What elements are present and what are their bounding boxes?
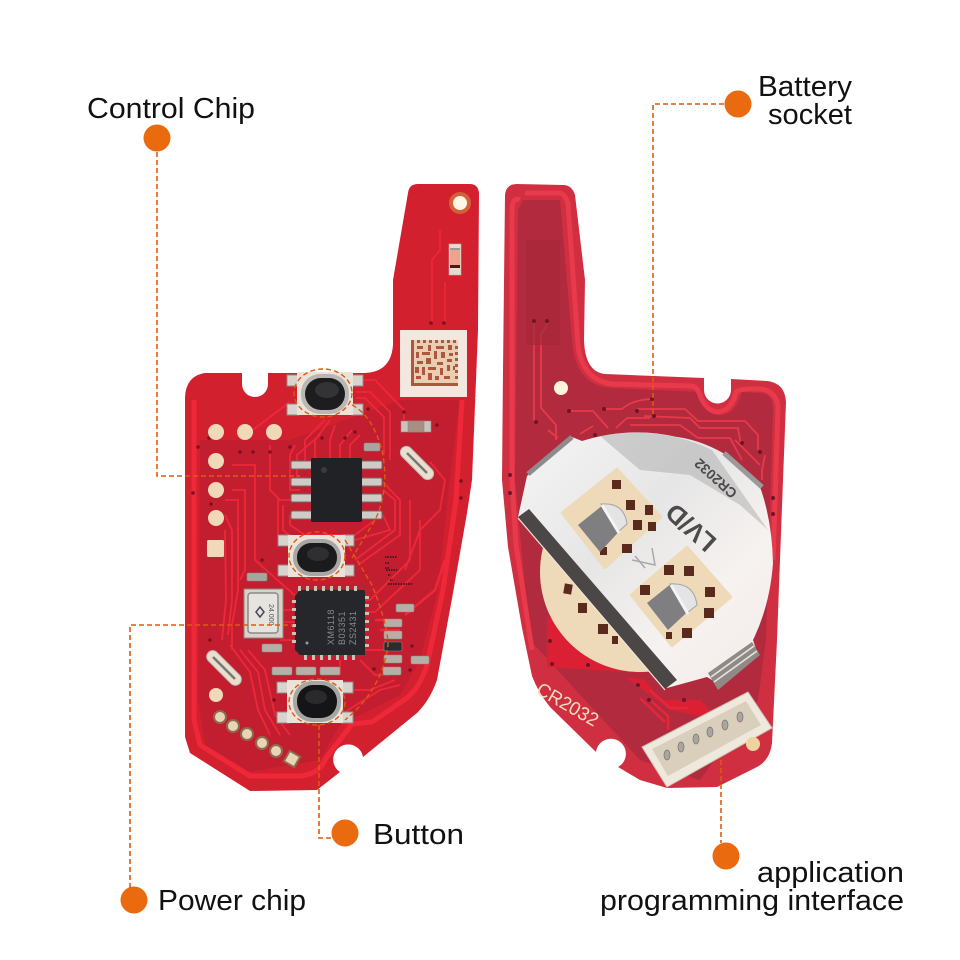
spring contacts <box>204 444 436 688</box>
programming connector <box>642 692 772 787</box>
callout: button <box>289 369 464 851</box>
control chip SOP8 <box>291 458 382 522</box>
callout: battery socket: socket <box>768 99 852 131</box>
panel: left circuit board, button side <box>185 184 479 791</box>
small capacitors and resistors <box>247 421 431 675</box>
callout: control chip: Control Chip <box>87 93 255 125</box>
crystal oscillator: 24.000 <box>267 604 274 626</box>
panel: right circuit board, battery side <box>502 184 786 788</box>
power chip QFN: XM6118 <box>326 609 336 645</box>
tan battery contact disc <box>540 472 740 672</box>
clip metal body <box>518 432 773 688</box>
clip stamped mark <box>632 548 655 568</box>
callout: application programming interface: programming interface <box>600 885 904 917</box>
button: top tact switch <box>287 372 363 415</box>
clip beveled dark edge <box>518 509 677 689</box>
tan contact pads <box>207 424 282 702</box>
stamped lettering <box>659 455 740 558</box>
stamped lettering: CR2032 <box>691 455 740 502</box>
callout: button: Button <box>373 819 464 851</box>
button: bottom tact switch <box>277 680 353 723</box>
infographic: key fob circuit board anatomy <box>88 76 903 916</box>
right clip rod <box>724 453 762 487</box>
silkscreen test mark <box>385 557 412 584</box>
LED component <box>449 244 461 275</box>
callout: battery socket: Battery <box>758 71 853 103</box>
power chip QFN: ZS2431 <box>348 610 358 645</box>
callout: power chip <box>120 625 306 917</box>
mounting hole <box>554 381 568 395</box>
upper spring tab <box>578 505 627 552</box>
mounting hole <box>449 192 471 214</box>
board outline <box>185 184 479 791</box>
callout: application programming interface <box>600 760 904 917</box>
callout: control chip <box>87 93 300 476</box>
board outline <box>502 184 786 788</box>
stamped lettering: LV/D <box>659 497 722 558</box>
button: middle tact switch <box>278 535 354 577</box>
lower clip crimp <box>708 642 760 690</box>
data matrix label <box>400 330 467 397</box>
callout: battery socket <box>653 71 853 415</box>
lower contact window <box>632 548 730 645</box>
silkscreen label CR2032: CR2032 <box>532 679 602 731</box>
stamped texture area <box>600 433 768 530</box>
faint silkscreen marks <box>533 322 549 345</box>
power chip QFN <box>292 586 369 660</box>
lower spring tab <box>647 583 697 630</box>
upper contact window <box>563 470 660 567</box>
power chip QFN: B03351 <box>337 611 347 645</box>
dashed highlight rings around buttons <box>289 369 388 725</box>
upper clip rod <box>528 437 572 474</box>
callout: application programming interface: application <box>757 857 904 889</box>
battery clip <box>518 432 773 690</box>
crystal oscillator <box>244 589 283 638</box>
programming pads row <box>214 711 300 767</box>
callout: power chip: Power chip <box>158 885 306 917</box>
